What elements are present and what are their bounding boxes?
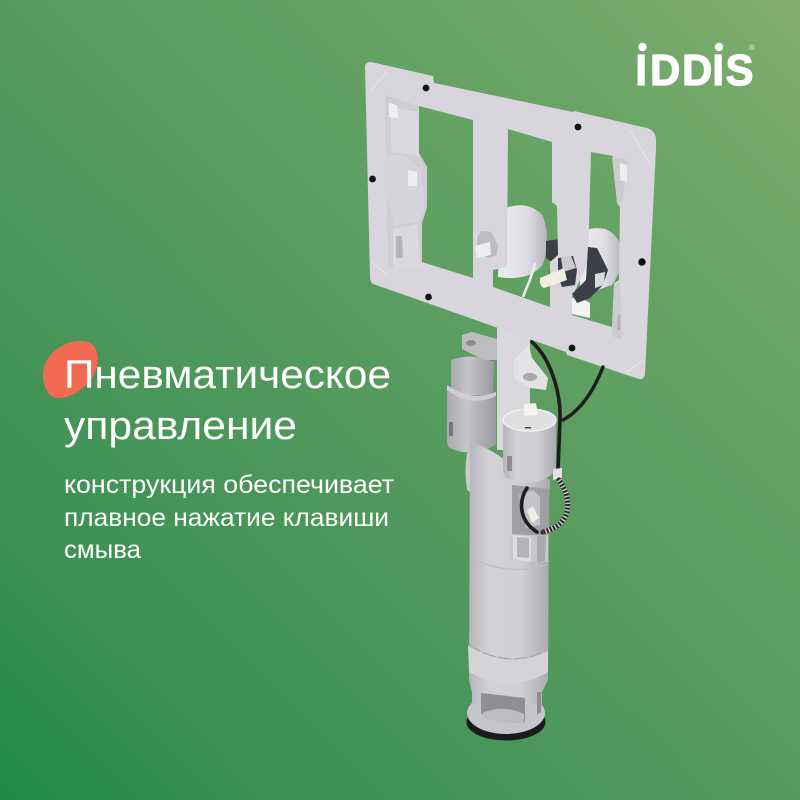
logo: iddis: IDDIS (635, 46, 753, 95)
logo: iddis: ® (749, 43, 755, 52)
description: конструкция обеспечивает (64, 471, 395, 499)
base window (481, 693, 525, 723)
cable loop and spring (522, 480, 568, 532)
pneumatic cable (532, 342, 603, 470)
description (64, 471, 395, 564)
right actuator (503, 403, 562, 482)
accent blob (43, 341, 98, 398)
mounting frame (365, 62, 656, 379)
left actuator (447, 332, 497, 492)
description: смыва (64, 536, 141, 564)
heading: управление (64, 404, 297, 448)
gear window (595, 272, 605, 288)
heading (64, 353, 391, 448)
rear actuators (498, 205, 622, 318)
main tube (468, 442, 550, 723)
heading: Пневматическое (64, 353, 391, 397)
dark gear front (572, 247, 608, 303)
description: плавное нажатие клавиши (64, 504, 389, 532)
tube window (512, 485, 549, 536)
product: flush mechanism (365, 62, 656, 740)
base flange and seal (466, 692, 546, 740)
screw holes (369, 85, 646, 351)
central stem (497, 320, 530, 450)
clip bracket (514, 345, 548, 390)
push pins (475, 231, 577, 288)
frame bevels (371, 72, 651, 373)
